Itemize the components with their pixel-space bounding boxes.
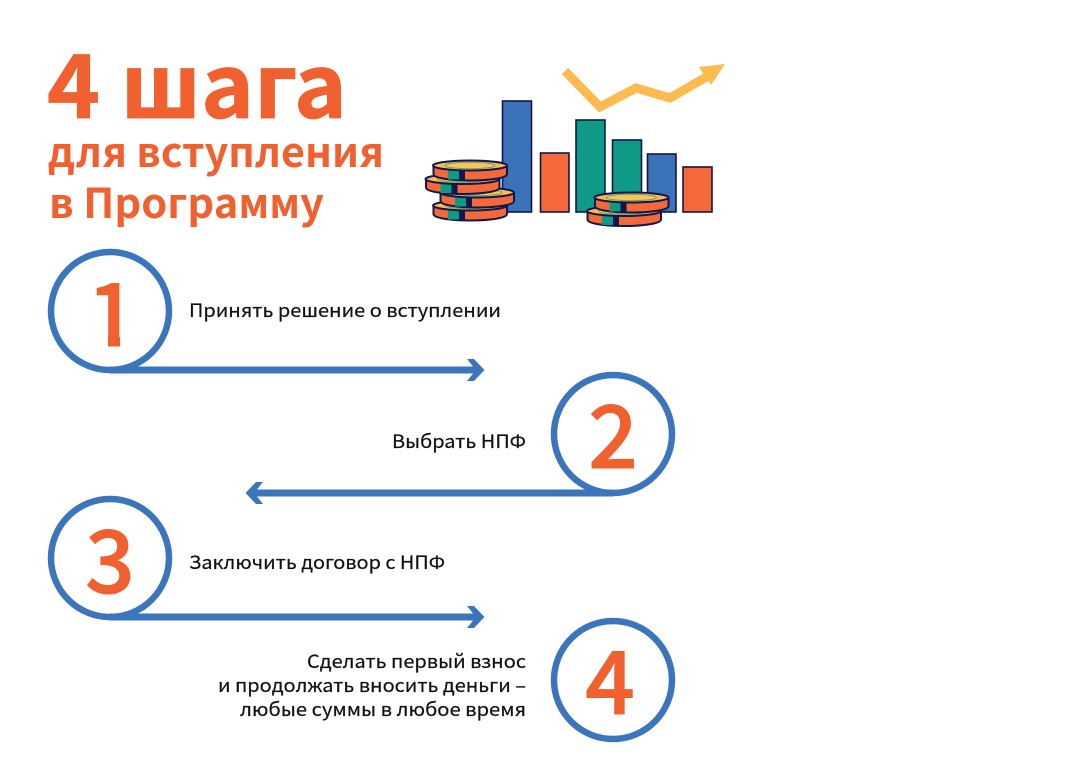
step 1 number: 1 (87, 246, 137, 372)
step 2 text: Выбрать НПФ (392, 428, 526, 454)
step 4 (218, 614, 672, 740)
icon: right coin stack (587, 192, 668, 226)
step 4 number: 4 (585, 614, 635, 740)
step 2 marker (554, 375, 672, 493)
step 3 (51, 493, 484, 628)
step 2 number: 2 (588, 368, 638, 494)
step 1 arrow (110, 359, 484, 381)
step 4 text: любые суммы в любое время (240, 696, 526, 722)
title: main line: 4 шага (47, 17, 347, 144)
step 1 text: Принять решение о вступлении (189, 297, 501, 323)
step 3 text: Заключить договор с НПФ (189, 549, 445, 575)
title: second line: для вступления (48, 119, 384, 179)
step 2 (246, 368, 672, 504)
icon: left coin stack (426, 160, 514, 220)
step 2 arrow (246, 482, 613, 504)
icon: rising arrow (565, 64, 725, 107)
step 4 text (218, 648, 526, 722)
step 3 marker (51, 499, 169, 617)
title: third line: в Программу (49, 170, 324, 230)
illustration: bar chart with coins and rising arrow (426, 64, 725, 226)
step 4 marker (554, 621, 672, 739)
step 1 marker (51, 252, 169, 370)
step 4 text: и продолжать вносить деньги – (218, 672, 526, 698)
step 1 (51, 246, 501, 381)
step 4 text: Сделать первый взнос (307, 648, 526, 674)
step 3 number: 3 (85, 493, 135, 619)
bar chart (502, 101, 712, 212)
title (47, 17, 384, 230)
step 3 arrow (110, 606, 484, 628)
